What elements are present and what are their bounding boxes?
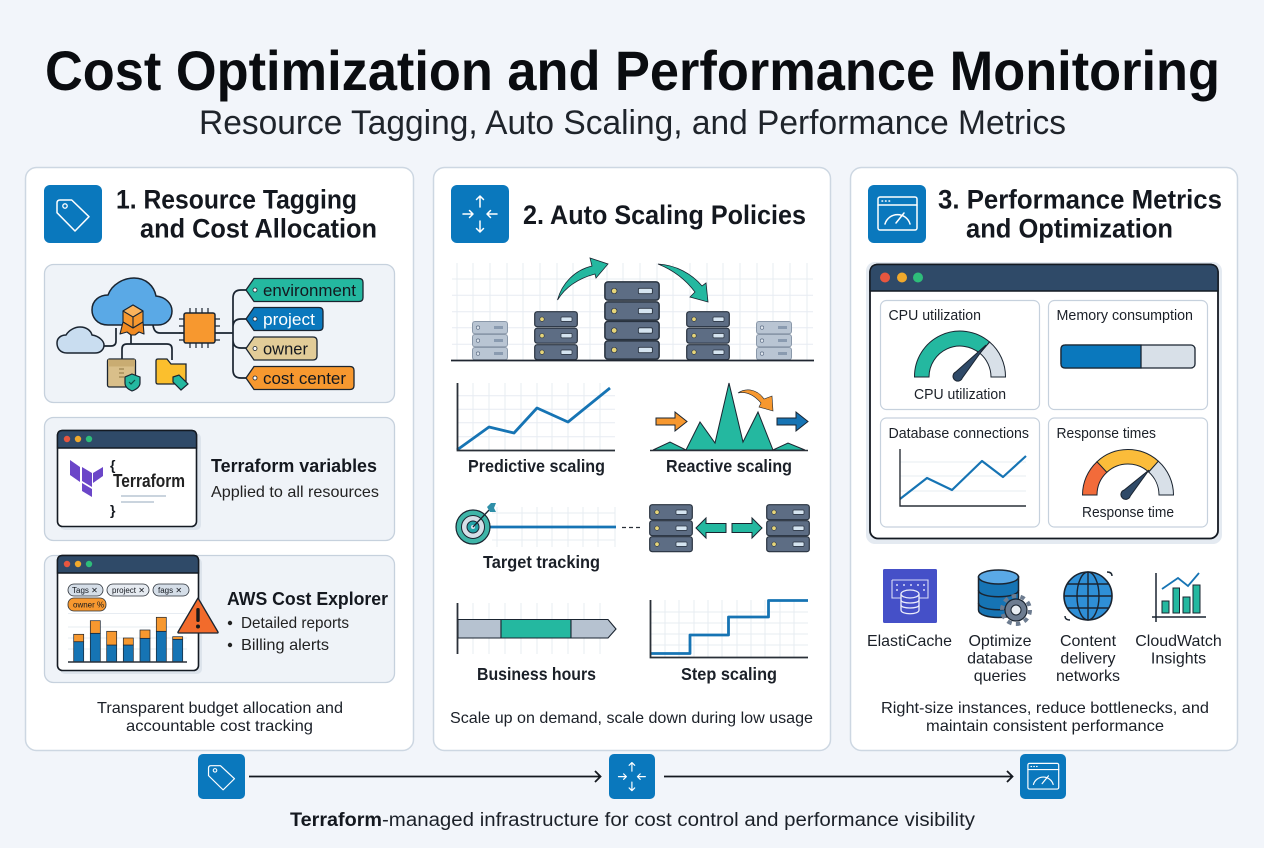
tool: elasticache — [867, 569, 952, 650]
tool: optimize database queries: queries — [974, 668, 1026, 685]
tag: project — [246, 308, 323, 330]
server stack: medium left — [535, 312, 577, 360]
tag: owner: owner — [263, 340, 308, 358]
caption: panel 1: accountable cost tracking — [126, 718, 313, 735]
terraform window: { — [110, 457, 116, 473]
tag: owner — [246, 337, 317, 360]
caption: panel 2: Scale up on demand, scale down during low usage — [450, 710, 813, 727]
tool: optimize database queries: database — [967, 650, 1033, 668]
tool: cloudwatch insights: CloudWatch — [1135, 633, 1222, 650]
arrow: scale down — [658, 264, 708, 302]
card: response times: Response times — [1056, 426, 1156, 442]
text: terraform variables: Terraform variables — [211, 455, 377, 476]
server stack: large center — [605, 282, 659, 359]
heading: panel 3: and Optimization — [966, 214, 1173, 244]
icon: small cloud — [57, 327, 104, 353]
terraform window — [58, 430, 201, 530]
filter pills: project ✕ — [112, 586, 145, 595]
tagging diagram — [44, 264, 394, 402]
card: response times: Response time — [1082, 505, 1174, 521]
arrow: scale up — [558, 258, 608, 300]
stacked bar chart — [68, 614, 187, 662]
icon: footer gauge — [1020, 754, 1066, 799]
filter pills: Tags ✕ — [72, 586, 98, 595]
chart: step scaling — [650, 600, 808, 684]
footer text: -managed infrastructure for cost control and performance visibility — [382, 810, 976, 831]
terraform variables block — [44, 418, 394, 540]
icon: elasticache — [883, 569, 937, 623]
cost explorer window — [58, 556, 202, 674]
text: aws cost explorer: Detailed reports — [241, 615, 349, 632]
footer flow — [198, 754, 1066, 831]
caption: panel 3: Right-size instances, reduce bottlenecks, and — [881, 700, 1209, 717]
panel: performance metrics and optimization — [850, 168, 1238, 750]
icon: storage box with shield — [108, 359, 140, 391]
panel: resource tagging and cost allocation — [26, 168, 414, 750]
card: database connections — [880, 418, 1040, 527]
icon: folder with tag — [156, 359, 188, 390]
subtitle: Resource Tagging, Auto Scaling, and Performance Metrics — [199, 104, 1066, 142]
server stack: right — [767, 505, 809, 552]
heading: panel 3 — [938, 184, 1222, 244]
text: terraform variables — [211, 455, 379, 501]
heading: panel 1: 1. Resource Tagging — [116, 184, 357, 214]
aws cost explorer block — [44, 556, 394, 682]
heading: panel 2: 2. Auto Scaling Policies — [523, 200, 806, 230]
tool: content delivery networks: networks — [1056, 668, 1120, 685]
icon: warning triangle — [178, 598, 218, 633]
arrow: orange in — [656, 412, 687, 431]
card: response times — [1048, 418, 1208, 527]
footer text: Terraform — [290, 810, 382, 831]
chart: target tracking: Target tracking — [483, 552, 600, 572]
tag: cost center: cost center — [263, 369, 346, 388]
arrow: scale out — [732, 518, 762, 538]
icon: bar and line chart — [1152, 573, 1206, 622]
icon: globe — [1064, 572, 1112, 620]
terraform window: } — [110, 502, 116, 518]
heading: panel 1: and Cost Allocation — [140, 214, 377, 244]
icon: footer tag — [198, 754, 245, 799]
caption: panel 1: Transparent budget allocation and — [97, 700, 343, 717]
text: terraform variables: Applied to all resources — [211, 484, 379, 501]
text: aws cost explorer — [227, 588, 388, 654]
icon: dashboard gauge — [868, 185, 926, 243]
arrow: scale in — [696, 518, 726, 538]
chart: reactive scaling: Reactive scaling — [666, 456, 792, 476]
server stack: medium right — [687, 312, 729, 360]
arrow: scaling to metrics — [664, 771, 1012, 782]
heading: panel 3: 3. Performance Metrics — [938, 184, 1222, 214]
icon: large cloud — [92, 278, 172, 325]
chart: predictive scaling — [457, 383, 615, 476]
chart: business hours — [458, 603, 616, 684]
tool: content delivery networks: delivery — [1060, 650, 1116, 668]
server pair with scaling arrows — [650, 505, 809, 552]
tool: content delivery networks: Content — [1060, 633, 1117, 650]
tag: environment — [246, 278, 363, 302]
terraform window: Terraform — [113, 471, 185, 491]
arrow: blue out — [777, 412, 808, 431]
metrics dashboard window — [866, 262, 1222, 544]
text: aws cost explorer: Billing alerts — [241, 637, 329, 654]
tool: content delivery networks — [1056, 572, 1120, 685]
card: database connections: Database connections — [888, 426, 1029, 442]
chart: target tracking — [456, 503, 643, 572]
card: memory consumption: Memory consumption — [1056, 308, 1193, 324]
tool: cloudwatch insights — [1135, 573, 1222, 668]
chart: step scaling: Step scaling — [681, 664, 777, 684]
card: cpu utilization: CPU utilization — [888, 308, 981, 324]
tag: cost center — [246, 366, 354, 390]
icon: database with gear — [978, 570, 1030, 624]
chart: predictive scaling: Predictive scaling — [468, 456, 605, 476]
filter pills — [68, 584, 189, 611]
server stack: small right — [756, 322, 792, 360]
tag: project: project — [263, 310, 315, 329]
icon: processor chip — [179, 308, 220, 348]
panel: auto scaling policies — [434, 168, 830, 750]
tool: optimize database queries: Optimize — [968, 633, 1032, 650]
caption: panel 1 — [97, 700, 343, 735]
filter pills: owner % — [73, 600, 104, 610]
caption: panel 3 — [881, 700, 1209, 735]
icon: target with dart — [456, 503, 496, 544]
connector lines — [104, 290, 248, 378]
icon: price tag — [44, 185, 102, 243]
arrow: tag to scaling — [249, 771, 600, 782]
card: cpu utilization — [880, 300, 1040, 410]
text: aws cost explorer: AWS Cost Explorer — [227, 588, 388, 609]
chart: reactive scaling — [650, 383, 808, 476]
heading: panel 1 — [116, 184, 377, 244]
server stack: small left — [472, 322, 508, 360]
tool: cloudwatch insights: Insights — [1151, 650, 1206, 668]
card: cpu utilization: CPU utilization — [914, 387, 1006, 403]
chart: business hours: Business hours — [477, 664, 596, 684]
caption: panel 3: maintain consistent performance — [926, 718, 1164, 735]
card: memory consumption — [1048, 300, 1208, 410]
filter pills: fags ✕ — [158, 586, 182, 595]
icon: scaling arrows — [451, 185, 509, 243]
arrow: orange curve — [738, 390, 773, 411]
tool: optimize database queries — [967, 570, 1033, 685]
server scaling diagram — [451, 258, 814, 360]
icon: footer scaling — [609, 754, 655, 799]
icon: terraform logo — [70, 460, 103, 497]
tag: environment: environment — [263, 281, 356, 300]
icon: resource cube — [120, 305, 144, 335]
server stack: left — [650, 505, 692, 552]
tool: elasticache: ElastiCache — [867, 633, 952, 650]
